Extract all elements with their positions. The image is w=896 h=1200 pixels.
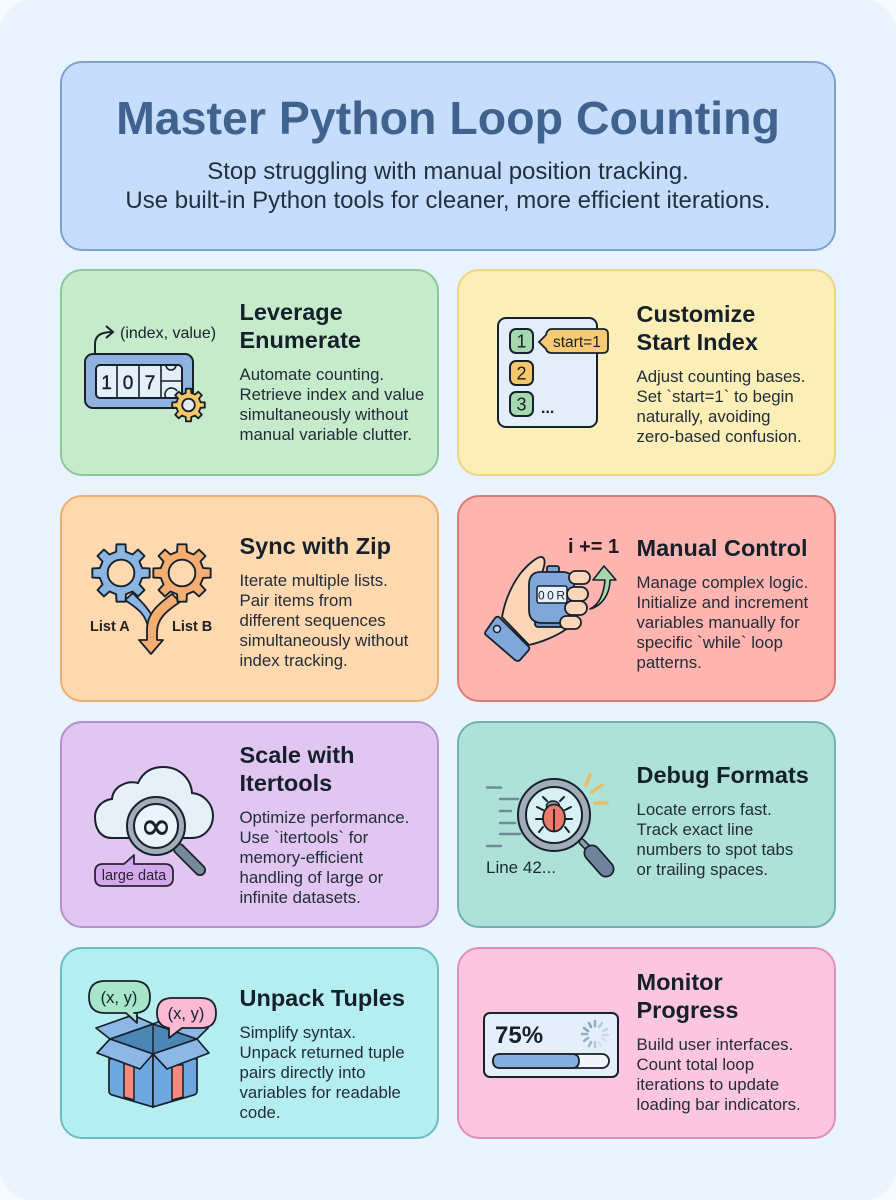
panel: Sync with Zip — [60, 495, 439, 702]
body text — [636, 1034, 801, 1114]
body text — [240, 1022, 405, 1122]
subtitle — [125, 158, 771, 214]
heading: Leverage — [240, 298, 343, 324]
icon: counter with gear — [84, 324, 216, 422]
icon: cloud with magnifier: large data — [101, 868, 167, 884]
body text: variables manually for — [636, 612, 800, 632]
body text: loading bar indicators. — [636, 1094, 801, 1114]
panel: Debug Formats — [457, 721, 836, 928]
body text: simultaneously without — [240, 630, 408, 650]
icon: open box with tuples — [88, 980, 217, 1108]
body text: Count total loop — [636, 1054, 754, 1074]
body text: different sequences — [240, 610, 386, 630]
icon: two gears merging — [90, 543, 212, 655]
heading — [636, 300, 758, 354]
icon: cloud with magnifier: ∞ — [140, 804, 171, 848]
body text: Manage complex logic. — [636, 572, 808, 592]
body text — [636, 572, 808, 672]
heading: Customize — [636, 300, 755, 326]
icon: numbered list: start=1 — [552, 334, 600, 350]
body text: Optimize performance. — [240, 808, 409, 826]
panel: Unpack Tuples — [60, 947, 439, 1139]
icon: two gears merging: List B — [172, 618, 212, 634]
body text: iterations to update — [636, 1074, 779, 1094]
body text: Initialize and increment — [636, 592, 808, 612]
body text: pairs directly into — [240, 1062, 365, 1082]
body text: memory-efficient — [240, 848, 363, 866]
heading — [240, 298, 361, 352]
body text: or trailing spaces. — [636, 860, 768, 878]
icon: numbered list — [497, 317, 609, 428]
heading: Progress — [636, 996, 738, 1022]
heading: Start Index — [636, 328, 758, 354]
panel: Leverage Enumerate — [60, 269, 439, 476]
body text: zero-based confusion. — [636, 426, 802, 446]
body text: Pair items from — [240, 590, 352, 610]
body text: Simplify syntax. — [240, 1022, 356, 1042]
body text: manual variable clutter. — [240, 424, 412, 444]
body text: Locate errors fast. — [636, 800, 772, 818]
body text: handling of large or — [240, 868, 383, 886]
body text: Retrieve index and value — [240, 384, 424, 404]
body text — [240, 364, 424, 444]
icon: open box with tuples: (x, y) — [167, 1004, 204, 1022]
heading — [636, 968, 738, 1023]
heading: Debug Formats — [636, 762, 809, 788]
heading — [240, 742, 354, 796]
title: Master Python Loop Counting — [116, 92, 780, 144]
subtitle: Stop struggling with manual position tracking. — [207, 158, 689, 185]
heading: Itertools — [240, 770, 332, 796]
icon: numbered list: 2 — [516, 363, 526, 383]
body text — [240, 570, 408, 670]
icon: progress bar — [483, 1012, 619, 1078]
heading: Monitor — [636, 968, 723, 994]
panel: Manual Control — [457, 495, 836, 702]
panel: Monitor Progress — [457, 947, 836, 1139]
body text: numbers to spot tabs — [636, 840, 793, 858]
body text: Set `start=1` to begin — [636, 386, 794, 406]
heading: Scale with — [240, 742, 354, 768]
heading: Unpack Tuples — [240, 984, 405, 1010]
body text: Unpack returned tuple — [240, 1042, 405, 1062]
subtitle: Use built-in Python tools for cleaner, more efficient iterations. — [125, 187, 771, 214]
icon: numbered list: 1 — [516, 331, 526, 351]
icon: numbered list: 3 — [516, 394, 526, 414]
heading: Enumerate — [240, 326, 361, 352]
icon: counter with gear: 1 — [101, 372, 111, 394]
panel: Scale with Itertools — [60, 721, 439, 928]
icon: counter with gear: (index, value) — [120, 324, 216, 342]
body text: Adjust counting bases. — [636, 366, 805, 386]
body text: specific `while` loop — [636, 632, 783, 652]
icon: counter with gear: 7 — [144, 372, 155, 394]
icon: cloud with magnifier — [94, 766, 214, 887]
body text: simultaneously without — [240, 404, 408, 424]
body text: Automate counting. — [240, 364, 384, 384]
body text: Use `itertools` for — [240, 828, 368, 846]
body text: Track exact line — [636, 820, 753, 838]
heading: Manual Control — [636, 534, 808, 560]
body text: infinite datasets. — [240, 888, 361, 906]
panel: header — [60, 61, 836, 251]
body text — [636, 366, 805, 446]
panel: Customize Start Index — [457, 269, 836, 476]
icon: two gears merging: List A — [90, 618, 130, 634]
body text: index tracking. — [240, 650, 348, 670]
body text: Iterate multiple lists. — [240, 570, 388, 590]
icon: open box with tuples: (x, y) — [100, 988, 137, 1006]
icon: hand with tally counter: 00R — [538, 588, 565, 602]
icon: numbered list: ... — [540, 400, 554, 416]
icon: hand with tally counter: i += 1 — [568, 536, 619, 558]
body text: naturally, avoiding — [636, 406, 771, 426]
icon: magnifier with bug — [486, 773, 614, 878]
icon: magnifier with bug: Line 42... — [486, 858, 555, 876]
body text: variables for readable — [240, 1082, 401, 1102]
body text — [636, 800, 793, 878]
heading: Sync with Zip — [240, 532, 391, 558]
icon: counter with gear: 0 — [122, 372, 133, 394]
body text: Build user interfaces. — [636, 1034, 793, 1054]
body text — [240, 808, 409, 906]
body text: code. — [240, 1102, 281, 1122]
icon: hand with tally counter — [484, 536, 619, 662]
body text: patterns. — [636, 652, 702, 672]
icon: progress bar: 75% — [494, 1022, 543, 1048]
